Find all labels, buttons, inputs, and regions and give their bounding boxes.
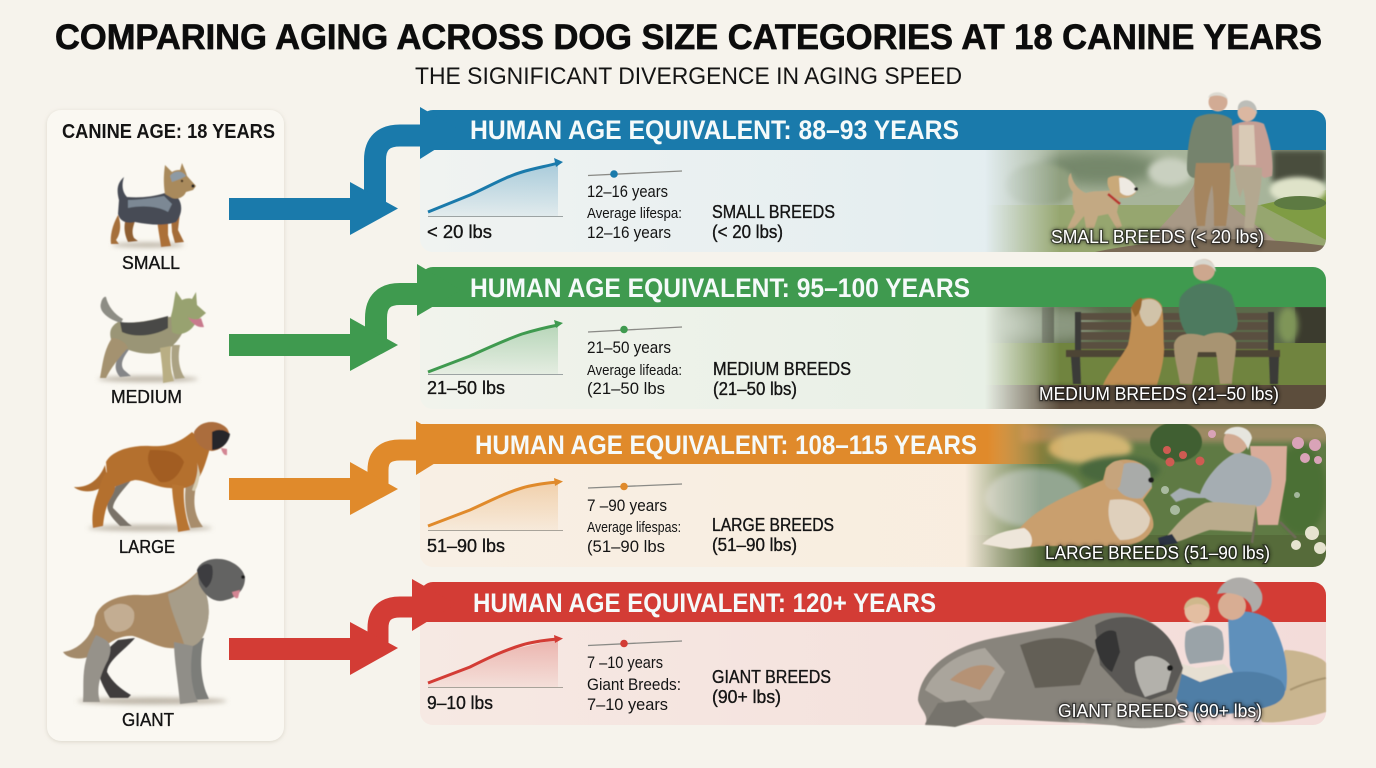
photo label: medium: MEDIUM BREEDS (21–50 lbs)	[1039, 384, 1279, 404]
panel heading: CANINE AGE: 18 YEARS	[62, 121, 275, 143]
lifespan slider: small	[588, 170, 682, 178]
lifespan text: large: 7 –90 years	[587, 496, 667, 515]
breed text: small: SMALL BREEDS	[712, 202, 835, 222]
weight label: small: < 20 lbs	[427, 222, 492, 242]
photo label: giant: GIANT BREEDS (90+ lbs)	[1058, 701, 1262, 721]
breed text: medium: MEDIUM BREEDS	[713, 359, 851, 379]
photo: man and dog in garden	[940, 422, 1330, 567]
lifespan slider: giant	[588, 640, 682, 647]
banner heading: giant: HUMAN AGE EQUIVALENT: 120+ YEARS	[473, 588, 936, 618]
lifespan text: giant	[587, 653, 681, 714]
photo figures: medium breeds	[1066, 259, 1280, 385]
arrow: large	[229, 421, 461, 515]
lifespan slider: medium	[588, 326, 682, 333]
lifespan text: small: 12–16 years	[587, 223, 671, 242]
arrow: medium	[229, 264, 461, 371]
lifespan text: medium: 21–50 years	[587, 338, 671, 357]
photo: couple walking dog in park	[960, 150, 1326, 252]
breed text: large: LARGE BREEDS	[712, 515, 834, 535]
photo figures: large breeds	[982, 427, 1296, 549]
subtitle: THE SIGNIFICANT DIVERGENCE IN AGING SPEED	[415, 63, 962, 90]
chart: medium	[428, 320, 563, 374]
panel: medium breeds row	[229, 259, 1326, 409]
photo figures: small breeds	[1067, 92, 1273, 229]
icon: large dog	[74, 422, 230, 532]
lifespan text: large: Average lifespas:	[587, 519, 681, 536]
panel: canine age dogs	[47, 110, 284, 741]
lifespan text: small: Average lifespa:	[587, 205, 682, 222]
banner: small	[420, 110, 1326, 150]
breed text: small	[712, 202, 835, 242]
lifespan text: giant: Giant Breeds:	[587, 675, 681, 694]
lifespan text: medium: (21–50 lbs	[587, 379, 665, 398]
panel: large breeds row	[229, 421, 1330, 567]
panel: small breeds row	[229, 92, 1326, 252]
banner heading: small: HUMAN AGE EQUIVALENT: 88–93 YEARS	[470, 115, 959, 145]
breed text: giant: (90+ lbs)	[712, 687, 781, 707]
photo: man and dog on bench	[960, 307, 1326, 409]
lifespan text: giant: 7–10 years	[587, 695, 668, 714]
breed text: giant: GIANT BREEDS	[712, 667, 831, 687]
photo label: small: SMALL BREEDS (< 20 lbs)	[1051, 227, 1264, 247]
lifespan text: giant: 7 –10 years	[587, 653, 663, 672]
photo label: large: LARGE BREEDS (51–90 lbs)	[1045, 543, 1270, 563]
breed text: medium	[713, 359, 851, 399]
lifespan text: large: (51–90 lbs	[587, 537, 665, 556]
label: giant: GIANT	[122, 710, 174, 730]
icon: giant dog	[63, 559, 245, 704]
lifespan text: small	[587, 182, 682, 242]
breed text: giant	[712, 667, 831, 707]
banner: medium	[420, 267, 1326, 307]
arrow: small	[229, 107, 463, 235]
label: small: SMALL	[122, 253, 180, 273]
breed text: small: (< 20 lbs)	[712, 222, 783, 242]
icon: small dog	[111, 163, 196, 248]
banner: large	[420, 424, 1080, 464]
chart: large	[428, 478, 563, 530]
arrow: giant	[229, 579, 456, 675]
lifespan slider: large	[588, 483, 682, 490]
panel: giant breeds row	[229, 578, 1326, 728]
photo figures: giant breeds	[918, 578, 1326, 728]
lifespan text: large	[587, 496, 681, 556]
weight label: large: 51–90 lbs	[427, 536, 505, 556]
chart: giant	[428, 635, 563, 688]
weight label: medium: 21–50 lbs	[427, 378, 505, 398]
lifespan text: small: 12–16 years	[587, 182, 668, 201]
lifespan text: medium: Average lifeada:	[587, 362, 682, 379]
breed text: medium: (21–50 lbs)	[713, 379, 797, 399]
label: large: LARGE	[119, 537, 175, 557]
banner heading: medium: HUMAN AGE EQUIVALENT: 95–100 YEARS	[470, 273, 970, 303]
weight label: giant: 9–10 lbs	[427, 693, 493, 713]
lifespan text: medium	[587, 338, 682, 398]
banner heading: large: HUMAN AGE EQUIVALENT: 108–115 YEARS	[475, 430, 977, 460]
chart: small	[428, 158, 563, 216]
icon: medium dog	[98, 291, 206, 383]
banner: giant	[420, 582, 1326, 622]
breed text: large: (51–90 lbs)	[712, 535, 797, 555]
breed text: large	[712, 515, 834, 555]
title: COMPARING AGING ACROSS DOG SIZE CATEGORIES AT 18 CANINE YEARS	[55, 18, 1322, 57]
label: medium: MEDIUM	[111, 387, 182, 407]
